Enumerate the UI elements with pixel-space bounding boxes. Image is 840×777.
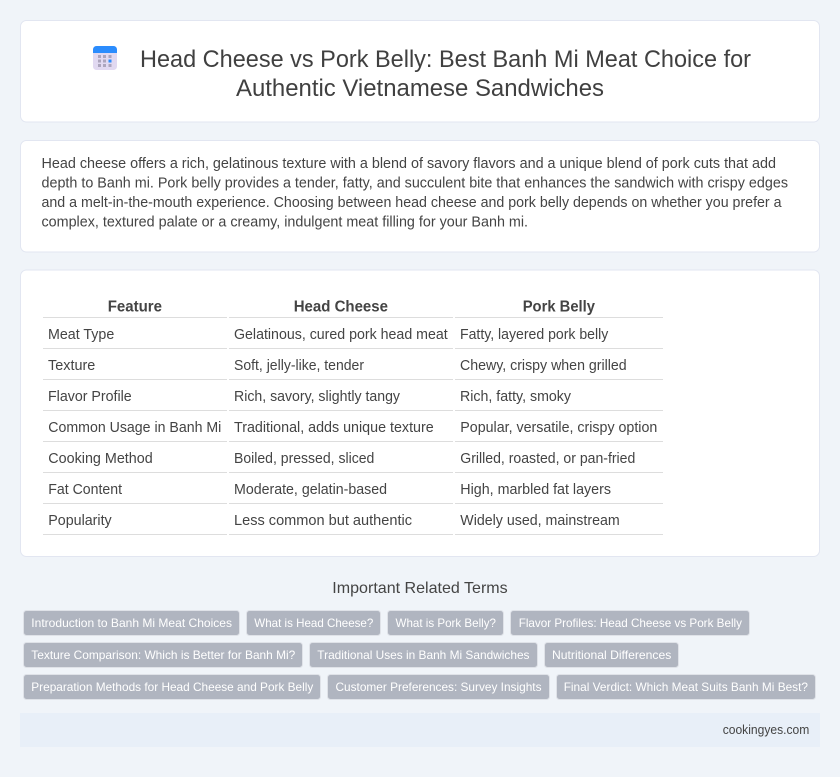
- tag: introduction: Introduction to Banh Mi Meat Choices: [31, 616, 232, 630]
- panel: comparison table: [20, 270, 820, 556]
- tag: nutritional differences: Nutritional Differences: [552, 648, 671, 662]
- table row: meat type: Meat Type: [48, 327, 114, 343]
- table row: meat type: Gelatinous, cured pork head meat: [234, 327, 448, 343]
- tag: texture comparison: Texture Comparison: Which is Better for Banh Mi?: [31, 648, 296, 662]
- table row: meat type: Fatty, layered pork belly: [460, 327, 609, 343]
- related terms heading: Important Related Terms: [332, 580, 508, 597]
- icon: calendar: [93, 46, 117, 70]
- tag: what is pork belly: What is Pork Belly?: [396, 616, 496, 630]
- tag: what is head cheese: [246, 610, 380, 636]
- table row: texture: Texture: [48, 358, 95, 374]
- tag: flavor profiles: Flavor Profiles: Head Cheese vs Pork Belly: [519, 616, 742, 630]
- table row: fat content: Moderate, gelatin-based: [234, 482, 387, 498]
- table row: popularity: Popularity: [48, 513, 112, 529]
- table row: cooking method: Boiled, pressed, sliced: [234, 451, 374, 467]
- table row: common usage: Common Usage in Banh Mi: [48, 420, 221, 436]
- panel: introduction: [20, 140, 820, 252]
- table row: common usage: Popular, versatile, crispy option: [460, 420, 657, 436]
- footer bar: [20, 713, 820, 747]
- tag: customer preferences: Customer Preferences: Survey Insights: [336, 680, 542, 694]
- intro paragraph: Head cheese offers a rich, gelatinous texture with a blend of savory flavors and a unique blend of pork cuts that add: [42, 156, 776, 172]
- table row: fat content: High, marbled fat layers: [460, 482, 611, 498]
- table row: texture: Soft, jelly-like, tender: [234, 358, 364, 374]
- tag: flavor profiles: [510, 610, 750, 636]
- table row: common usage: Traditional, adds unique texture: [234, 420, 434, 436]
- title: Authentic Vietnamese Sandwiches: [236, 75, 604, 102]
- tag: texture comparison: [24, 642, 302, 668]
- title: [140, 46, 751, 102]
- tag: what is head cheese: What is Head Cheese?: [254, 616, 374, 630]
- intro paragraph: and a melt-in-the-mouth experience. Choosing between head cheese and pork belly depends on whether you prefer a: [42, 195, 782, 211]
- tag: customer preferences: [328, 674, 550, 700]
- tag: nutritional differences: [544, 642, 678, 668]
- tag: traditional uses: [310, 642, 538, 668]
- footer source text: cookingyes.com: [723, 723, 809, 737]
- table header row: Pork Belly: [523, 298, 595, 316]
- table row: flavor profile: Flavor Profile: [48, 389, 132, 405]
- intro paragraph: [42, 156, 788, 230]
- tag: final verdict: [556, 674, 816, 700]
- table row: fat content: Fat Content: [48, 482, 122, 498]
- table row: texture: [43, 358, 663, 380]
- intro paragraph: complex, textured palate or a creamy, indulgent meat filling for your Banh mi.: [42, 214, 528, 230]
- tag: what is pork belly: [388, 610, 504, 636]
- table row: cooking method: [43, 451, 663, 473]
- table row: flavor profile: [43, 389, 663, 411]
- table row: cooking method: Grilled, roasted, or pan-fried: [460, 451, 635, 467]
- table header row: Head Cheese: [294, 298, 388, 316]
- title: Head Cheese vs Pork Belly: Best Banh Mi Meat Choice for: [140, 46, 751, 73]
- table row: popularity: Less common but authentic: [234, 513, 412, 529]
- table row: cooking method: Cooking Method: [48, 451, 153, 467]
- table row: flavor profile: Rich, fatty, smoky: [460, 389, 572, 405]
- table row: meat type: [43, 327, 663, 349]
- table row: common usage: [43, 420, 663, 442]
- header panel: [20, 20, 820, 122]
- table row: fat content: [43, 482, 663, 504]
- table header row: [43, 298, 663, 318]
- table row: flavor profile: Rich, savory, slightly tangy: [234, 389, 401, 405]
- tag: preparation methods: Preparation Methods for Head Cheese and Pork Belly: [31, 680, 313, 694]
- related terms tags: [24, 610, 816, 700]
- table header row: Feature: [108, 298, 162, 316]
- tag: final verdict: Final Verdict: Which Meat Suits Banh Mi Best?: [564, 680, 808, 694]
- tag: traditional uses: Traditional Uses in Banh Mi Sandwiches: [317, 648, 530, 662]
- tag: preparation methods: [24, 674, 320, 700]
- table row: texture: Chewy, crispy when grilled: [460, 358, 627, 374]
- tag: introduction: [24, 610, 240, 636]
- table row: popularity: [43, 513, 663, 535]
- table row: popularity: Widely used, mainstream: [460, 513, 620, 529]
- intro paragraph: depth to Banh mi. Pork belly provides a tender, fatty, and succulent bite that enhances the sandwich with crispy edges: [42, 176, 788, 192]
